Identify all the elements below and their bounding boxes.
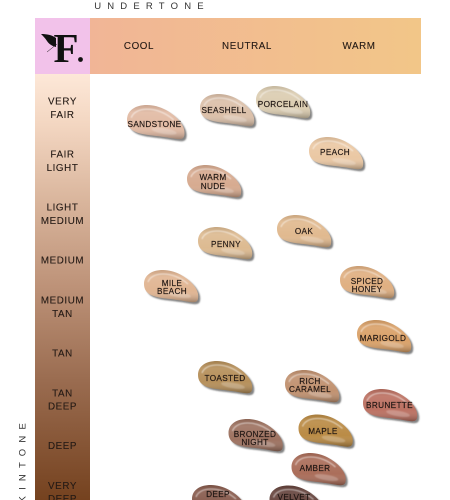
label: deep: DEEP	[206, 490, 230, 499]
skin tone scale bar: TAN	[52, 388, 73, 400]
label: rich caramel: CARAMEL	[289, 385, 331, 394]
label: bronzed night	[234, 430, 276, 447]
label: peach: PEACH	[320, 148, 350, 157]
skin tone scale bar: VERY	[48, 96, 77, 108]
skin tone scale bar: TAN	[52, 348, 73, 360]
label: spiced honey	[351, 277, 383, 294]
label: mile beach: BEACH	[157, 287, 187, 296]
swatch: maple	[298, 414, 355, 449]
skin tone scale bar: DEEP	[48, 441, 77, 452]
label: mile beach	[157, 279, 187, 296]
header band: undertone scale: NEUTRAL	[222, 41, 272, 52]
swatch: spiced honey	[340, 266, 396, 300]
label: rich caramel	[289, 377, 331, 394]
label: sandstone: SANDSTONE	[128, 120, 182, 129]
skin tone scale bar: MEDIUM	[41, 216, 84, 227]
label: oak: OAK	[295, 227, 313, 236]
skin tone scale bar: LIGHT	[47, 163, 78, 174]
header band: undertone scale: COOL	[124, 41, 154, 52]
label: warm nude: NUDE	[201, 182, 225, 191]
swatch: velvet	[270, 486, 326, 500]
swatch: bronzed night	[228, 419, 285, 453]
swatch: toasted	[198, 361, 254, 395]
logo tile	[35, 18, 90, 74]
swatch: warm nude	[187, 165, 243, 199]
axis title: undertone: UNDERTONE	[94, 1, 210, 12]
swatch: mile beach	[144, 270, 200, 304]
swatch: sandstone	[127, 105, 187, 141]
swatch: brunette	[363, 389, 419, 423]
label: marigold: MARIGOLD	[360, 334, 406, 343]
swatch: rich caramel	[285, 370, 341, 404]
label: spiced honey: SPICED	[351, 277, 383, 286]
label: seashell: SEASHELL	[201, 106, 247, 115]
skin tone scale bar: MEDIUM	[41, 296, 84, 306]
label: bronzed night: BRONZED	[234, 430, 276, 439]
logo tile: F	[53, 25, 79, 71]
skin tone scale bar: TAN	[52, 309, 73, 320]
label: rich caramel: RICH	[299, 377, 321, 386]
label: spiced honey: HONEY	[352, 285, 383, 294]
label: brunette: BRUNETTE	[366, 401, 413, 410]
label: bronzed night: NIGHT	[241, 438, 269, 447]
skin tone scale bar: FAIR	[50, 150, 75, 160]
skin tone scale bar: MEDIUM	[41, 256, 84, 266]
swatch: porcelain	[256, 86, 312, 120]
label: penny: PENNY	[211, 240, 241, 249]
swatch: amber	[292, 453, 348, 487]
label: amber: AMBER	[300, 464, 330, 473]
swatch: oak	[277, 215, 333, 249]
label: maple: MAPLE	[308, 427, 338, 436]
swatch: peach	[309, 137, 365, 171]
skin tone scale bar: FAIR	[50, 110, 75, 121]
label: toasted: TOASTED	[205, 374, 245, 383]
label: warm nude	[199, 173, 227, 191]
label: warm nude: WARM	[199, 173, 227, 182]
skin tone scale bar: DEEP	[48, 402, 77, 412]
header band: undertone scale	[90, 18, 421, 74]
skin tone scale bar	[35, 74, 90, 500]
skin tone scale bar: VERY	[48, 481, 77, 492]
label: porcelain: PORCELAIN	[258, 100, 308, 109]
header band: undertone scale: WARM	[342, 41, 376, 52]
swatch: marigold	[357, 320, 413, 354]
swatch: penny	[198, 227, 254, 261]
swatch: seashell	[200, 94, 256, 128]
skin tone scale bar: LIGHT	[47, 202, 78, 214]
swatch: deep	[192, 485, 248, 500]
label: mile beach: MILE	[162, 279, 182, 288]
